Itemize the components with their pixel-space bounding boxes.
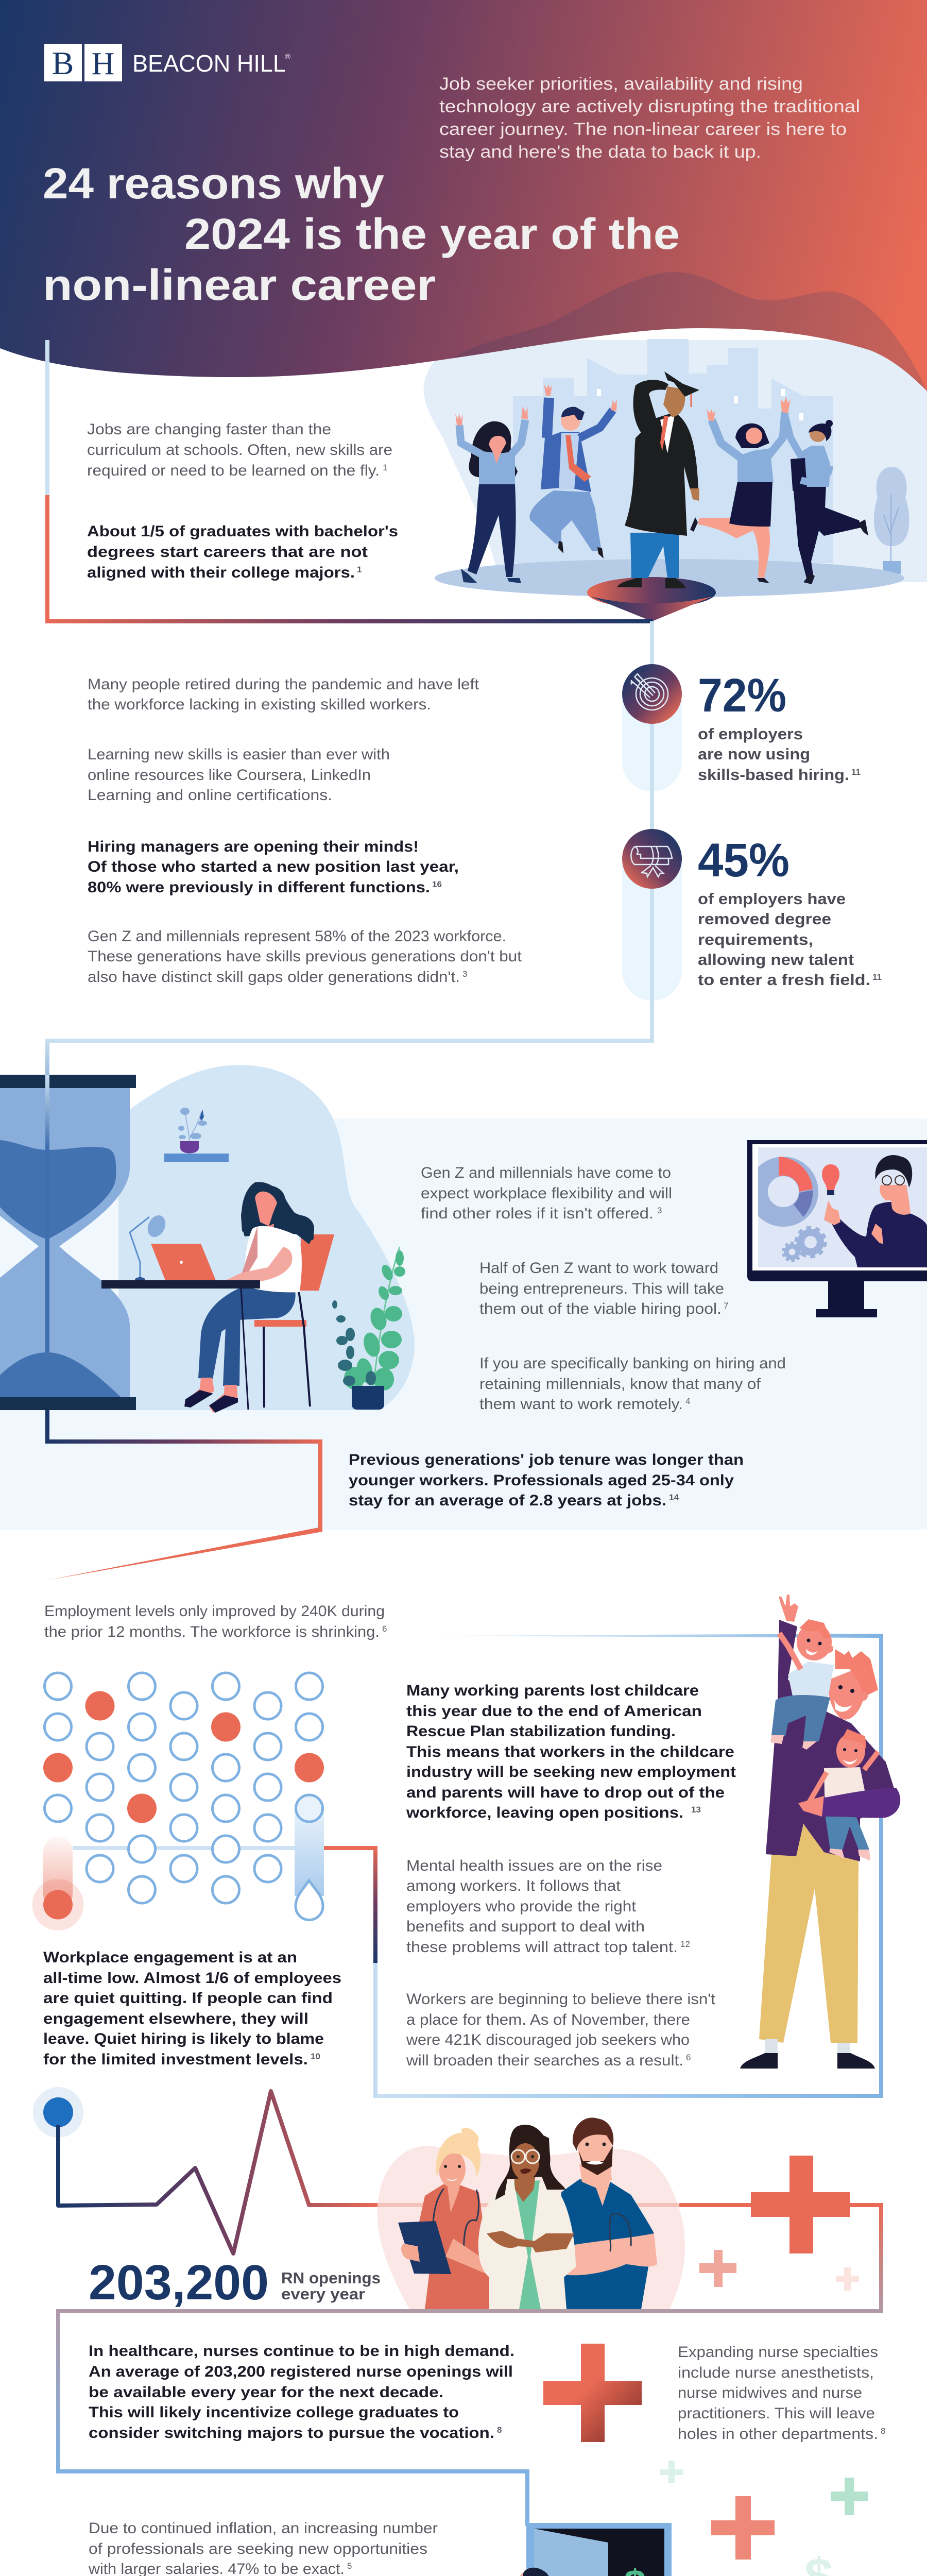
text block: flexibility and entrepreneurs: being entrepreneurs. This will take [479, 1280, 724, 1297]
text: job tenure: Previous generations' job tenure was longer than [349, 1451, 744, 1468]
father [740, 1595, 899, 2069]
text: nurse specialties: include nurse anesthetists, [678, 2364, 874, 2381]
text block: skills and hiring: Many people retired during the pandemic and have left [88, 676, 479, 693]
text: childcare funding: Many working parents lost childcare [406, 1682, 699, 1699]
text block: flexibility and entrepreneurs: them out of the viable hiring pool. [479, 1300, 722, 1317]
blob behind desk [118, 1065, 415, 1410]
text: jobs are changing: required or need to be learned on the fly. [87, 462, 380, 479]
illustration: presenter on monitor [747, 1140, 927, 1317]
text: nurse specialties: holes in other departments. [678, 2426, 878, 2443]
text block: flexibility and entrepreneurs: expect workplace flexibility and will [421, 1185, 672, 1202]
heartbeat line [58, 2091, 377, 2253]
red cross: gradient [543, 2344, 642, 2442]
child on shoulders [770, 1619, 834, 1750]
text: job tenure: 14 [669, 1493, 679, 1502]
text: mental health and discouraged seekers: will broaden their searches as a result. [406, 2052, 683, 2069]
title: 24 reasons why [43, 159, 384, 208]
text: mental health and discouraged seekers: a place for them. As of November, there [406, 2011, 690, 2028]
stat: 72% [622, 664, 861, 791]
header gradient background [0, 0, 927, 391]
text: nurses in demand: An average of 203,200 registered nurse openings will [89, 2363, 513, 2380]
statistic: 203,200 RN openings [89, 2255, 381, 2310]
text block: skills and hiring: Hiring managers are opening their minds! [88, 838, 419, 855]
text: job tenure: younger workers. Professionals aged 25-34 only [349, 1472, 734, 1489]
text: mental health and discouraged seekers: employers who provide the right [406, 1898, 637, 1915]
text: nurse specialties: nurse midwives and nurse [678, 2384, 862, 2401]
text: childcare funding: This means that workers in the childcare [406, 1743, 734, 1760]
text block: flexibility and entrepreneurs: retaining millennials, know that many of [479, 1376, 761, 1393]
stat: 45%: requirements, [698, 930, 813, 948]
text: workplace engagement: are quiet quitting. If people can find [43, 1990, 333, 2007]
text: nurses in demand: This will likely incentivize college graduates to [89, 2404, 459, 2421]
icon: light bulb [822, 1164, 839, 1195]
stat: 72%: 11 [851, 767, 861, 777]
text: nurses in demand: 8 [497, 2425, 502, 2435]
text: childcare funding: 13 [691, 1805, 701, 1815]
woman with skirt [690, 397, 791, 583]
band: generations background [0, 1118, 927, 1530]
text: employment levels: Employment levels only improved by 240K during [44, 1603, 385, 1620]
lamp [130, 1212, 169, 1282]
woman 1 [455, 406, 528, 583]
statistic: 203,200 RN openings: RN openings [281, 2269, 381, 2287]
text: mental health and discouraged seekers: were 421K discouraged job seekers who [406, 2031, 690, 2048]
text: inflation and layoffs: Due to continued inflation, an increasing number [89, 2520, 438, 2537]
illustration: three healthcare workers [377, 2117, 685, 2309]
text: workplace engagement: Workplace engagement is at an [43, 1949, 297, 1966]
text: childcare funding: this year due to the end of American [406, 1703, 702, 1720]
text block: flexibility and entrepreneurs: them want to work remotely. [479, 1396, 683, 1413]
stat: 45% [622, 829, 882, 1001]
text: workplace engagement: all-time low. Almost 1/6 of employees [43, 1970, 341, 1987]
text block: flexibility and entrepreneurs: find other roles if it isn't offered. [421, 1205, 654, 1222]
red cross: medium [699, 2250, 736, 2287]
graduate in black gown [617, 371, 699, 588]
logo: Beacon Hill top: BEACON HILL [132, 50, 286, 77]
illustration: hourglass [0, 1075, 136, 1410]
text: childcare funding: workforce, leaving open positions. [406, 1804, 683, 1821]
text: workplace engagement: for the limited investment levels. [43, 2051, 308, 2068]
text block: skills and hiring: the workforce lacking in existing skilled workers. [88, 696, 431, 713]
stat: 45%: of employers have [698, 890, 846, 908]
illustration: shelf and vase [164, 1108, 229, 1162]
text: jobs are changing: 1 [383, 463, 387, 472]
text: workplace engagement: leave. Quiet hiring is likely to blame [43, 2030, 324, 2047]
red cross: large [751, 2156, 850, 2253]
statistic: 203,200 RN openings: every year [281, 2285, 365, 2303]
nurse: right in blue scrubs [561, 2117, 657, 2309]
stat: 72%: skills-based hiring. [698, 766, 849, 784]
text block: skills and hiring: 3 [462, 969, 467, 979]
text: childcare funding: industry will be seeking new employment [406, 1764, 736, 1781]
text block: skills and hiring: Learning new skills is easier than ever with [88, 746, 390, 763]
text: mental health and discouraged seekers: benefits and support to deal with [406, 1918, 645, 1935]
stat: 45%: 45% [698, 834, 789, 887]
logo: Beacon Hill top: B [52, 45, 74, 81]
title: 2024 is the year of the [184, 210, 680, 258]
text: inflation and layoffs [88, 2520, 438, 2576]
text: employment levels: the prior 12 months. The workforce is shrinking. [44, 1623, 380, 1640]
text block: skills and hiring: 16 [432, 879, 442, 889]
stat: 72%: are now using [698, 745, 810, 763]
icon: start marker blue dot [33, 2087, 83, 2138]
chart: dot matrix of employees [32, 1673, 324, 1930]
text block: skills and hiring: online resources like Coursera, LinkedIn [88, 767, 371, 784]
text: employment levels: 6 [382, 1624, 387, 1634]
text block: skills and hiring: These generations have skills previous generations don't but [88, 948, 522, 965]
text block: flexibility and entrepreneurs: Gen Z and millennials have come to [421, 1164, 671, 1181]
text: nurses in demand [89, 2343, 514, 2442]
icon: gears [783, 1228, 825, 1261]
stat: 45%: allowing new talent [698, 951, 854, 969]
mint and salmon crosses [660, 2461, 868, 2560]
text: nurses in demand: be available every year for the next decade. [89, 2384, 443, 2401]
text: one fifth of graduates: About 1/5 of graduates with bachelor's [87, 523, 398, 540]
text block: skills and hiring: Gen Z and millennials represent 58% of the 2023 workforce. [88, 928, 506, 945]
text block: flexibility and entrepreneurs [421, 1164, 786, 1413]
text: one fifth of graduates: degrees start careers that are not [87, 544, 368, 561]
text block: skills and hiring: Learning and online certifications. [88, 787, 332, 804]
icon: diploma scroll [631, 846, 672, 877]
text: childcare funding [406, 1682, 736, 1821]
text: mental health and discouraged seekers: Mental health issues are on the rise [406, 1857, 662, 1874]
child held by parent [798, 1729, 900, 1861]
connector frame: healthcare [56, 2203, 883, 2526]
text: jobs are changing [87, 421, 392, 479]
text block: flexibility and entrepreneurs: Half of Gen Z want to work toward [479, 1260, 718, 1277]
text block: skills and hiring: Of those who started a new position last year, [88, 858, 459, 875]
illustration: potted leafy plant [332, 1247, 405, 1410]
connector frame: childcare [307, 1634, 883, 2098]
illustration: woman at desk [101, 1182, 334, 1413]
man in blue jacket [529, 384, 617, 558]
text: mental health and discouraged seekers: among workers. It follows that [406, 1877, 621, 1894]
decorative hill shape [452, 272, 927, 391]
text block: flexibility and entrepreneurs: If you are specifically banking on hiring and [479, 1355, 786, 1372]
text: inflation and layoffs: of professionals are seeking new opportunities [89, 2540, 427, 2557]
text: one fifth of graduates [87, 523, 398, 581]
stat: 72%: of employers [698, 725, 803, 743]
text: one fifth of graduates: aligned with their college majors. [87, 564, 355, 581]
text: nurse specialties: practitioners. This will leave [678, 2405, 875, 2422]
text block: flexibility and entrepreneurs: 4 [685, 1396, 690, 1406]
connector line: section 3 [45, 1410, 322, 1580]
chair [254, 1234, 334, 1408]
stat: 45%: removed degree [698, 910, 831, 928]
text block: flexibility and entrepreneurs: 3 [657, 1206, 662, 1215]
intro text: career journey. The non-linear career is here to [439, 120, 847, 139]
logo: Beacon Hill top [44, 44, 290, 81]
text: mental health and discouraged seekers [406, 1857, 716, 2069]
stat: 45%: 11 [872, 972, 882, 982]
icon: target and arrow [631, 674, 668, 710]
text: nurse specialties [678, 2344, 885, 2443]
text: job tenure: stay for an average of 2.8 years at jobs. [349, 1492, 666, 1509]
title [43, 159, 680, 309]
statistic: 203,200 RN openings: 203,200 [89, 2255, 269, 2310]
logo: Beacon Hill top: H [92, 46, 114, 81]
text: nurse specialties: 8 [881, 2426, 885, 2436]
text: workplace engagement: engagement elsewhere, they will [43, 2010, 308, 2027]
text block: skills and hiring: 80% were previously in different functions. [88, 879, 430, 896]
text block: skills and hiring: also have distinct skill gaps older generations didn't. [88, 969, 460, 986]
intro text [439, 74, 860, 162]
text: nurses in demand: consider switching majors to pursue the vocation. [89, 2425, 494, 2442]
illustration: open door with dollars [526, 2523, 678, 2576]
text: workplace engagement [43, 1949, 341, 2068]
text: childcare funding: and parents will have to drop out of the [406, 1784, 725, 1801]
text: one fifth of graduates: 1 [357, 565, 362, 574]
nurse: left with clipboard [398, 2128, 494, 2309]
logo: Beacon Hill top: ® [285, 53, 290, 61]
text: mental health and discouraged seekers: 12 [680, 1939, 690, 1949]
icon: potted plant [874, 467, 909, 574]
text: mental health and discouraged seekers: Workers are beginning to believe there isn't [406, 1991, 716, 2008]
doctor: middle in white coat [478, 2125, 576, 2309]
text: employment levels [44, 1603, 387, 1640]
text: childcare funding: Rescue Plan stabilization funding. [406, 1723, 676, 1740]
stat: 72%: 72% [698, 669, 786, 722]
title: non-linear career [43, 261, 436, 309]
spotlight cone [587, 577, 716, 621]
red cross: faint [836, 2267, 859, 2291]
text: mental health and discouraged seekers: 6 [686, 2053, 691, 2062]
connector line: section 1 [45, 340, 653, 623]
text: workplace engagement: 10 [311, 2052, 320, 2061]
text: job tenure [349, 1451, 744, 1509]
text: nurses in demand: In healthcare, nurses continue to be in high demand. [89, 2343, 514, 2360]
text: mental health and discouraged seekers: these problems will attract top talent. [406, 1939, 678, 1956]
stat: 45%: to enter a fresh field. [698, 971, 870, 989]
text: inflation and layoffs: 5 [347, 2561, 352, 2571]
text block: flexibility and entrepreneurs: 7 [724, 1301, 728, 1311]
text: jobs are changing: Jobs are changing faster than the [87, 421, 331, 438]
light blue blob behind graduates [424, 340, 927, 582]
text: jobs are changing: curriculum at schools. Often, new skills are [87, 442, 392, 459]
text: nurse specialties: Expanding nurse specialties [678, 2344, 878, 2361]
intro text: stay and here's the data to back it up. [439, 142, 761, 162]
intro text: technology are actively disrupting the traditional [439, 97, 860, 116]
text block: skills and hiring [88, 676, 522, 986]
illustration: family with children on shoulders [740, 1595, 900, 2069]
donut chart [758, 1157, 813, 1217]
connector line: section 2 [45, 621, 654, 1148]
intro text: Job seeker priorities, availability and rising [439, 74, 803, 94]
illustration: graduates and colleagues [435, 339, 909, 621]
woman with clipboard [785, 417, 868, 584]
illustration: man carrying box [449, 2568, 598, 2576]
